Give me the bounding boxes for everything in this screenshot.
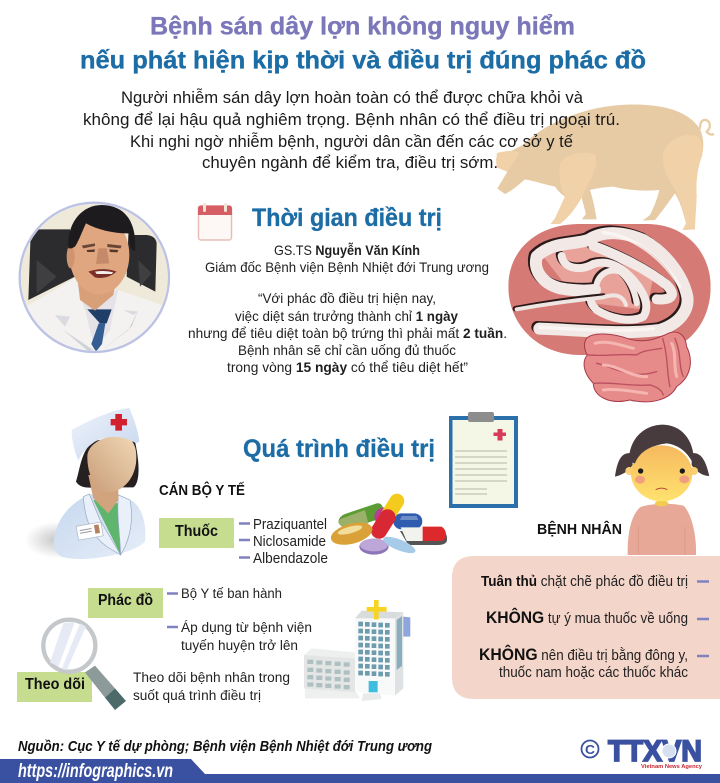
panel: patient rules bbox=[452, 556, 720, 699]
text: monitoring note: suốt quá trình điều trị bbox=[133, 688, 261, 703]
photo: doctor portrait bbox=[20, 203, 170, 357]
intro text bbox=[83, 88, 620, 172]
box: monitoring: Theo dõi bbox=[25, 676, 85, 693]
list: medicines: Niclosamide bbox=[253, 534, 326, 550]
text: monitoring note bbox=[133, 670, 290, 703]
box: treatment protocol bbox=[88, 588, 163, 618]
panel: patient rules: KHÔNG tự ý mua thuốc về uống bbox=[486, 608, 688, 627]
intro text: Người nhiễm sán dây lợn hoàn toàn có thể được chữa khỏi và bbox=[121, 88, 584, 107]
logo: TTXVN: TTXVN bbox=[608, 735, 702, 768]
logo: TTXVN: Vietnam News Agency bbox=[641, 764, 703, 770]
text block: expert quote: trong vòng 15 ngày có thể tiêu diệt hết” bbox=[227, 359, 468, 375]
text: monitoring note: Theo dõi bệnh nhân trong bbox=[133, 670, 290, 685]
title: Bệnh sán dây lợn không nguy hiểm bbox=[150, 12, 575, 40]
photo: tapeworm bbox=[507, 222, 713, 402]
list: protocol bbox=[167, 586, 312, 653]
heading: treatment time: Thời gian điều trị bbox=[252, 204, 442, 232]
icon: sick girl bbox=[615, 425, 709, 555]
footer bar bbox=[0, 759, 720, 783]
intro text: Khi nghi ngờ nhiễm bệnh, người dân cần đến các cơ sở y tế bbox=[130, 132, 574, 151]
panel: patient rules: KHÔNG nên điều trị bằng đông y, bbox=[479, 645, 688, 664]
icon: hospital bbox=[304, 600, 410, 701]
footer bar: https://infographics.vn bbox=[18, 761, 173, 782]
source line: Nguồn: Cục Y tế dự phòng; Bệnh viện Bệnh Nhiệt đới Trung ương bbox=[18, 738, 432, 755]
text block: expert quote: Giám đốc Bệnh viện Bệnh Nhiệt đới Trung ương bbox=[205, 259, 489, 275]
icon: magnifying glass bbox=[43, 620, 126, 710]
intro text: chuyên ngành để kiểm tra, điều trị sớm. bbox=[202, 153, 498, 172]
list: medicines: Praziquantel bbox=[253, 517, 327, 533]
text block: expert quote: việc diệt sán trưởng thành chỉ 1 ngày bbox=[235, 308, 458, 324]
list: protocol: Áp dụng từ bệnh viện bbox=[181, 620, 312, 635]
text block: expert quote bbox=[188, 242, 507, 375]
label: health staff: CÁN BỘ Y TẾ bbox=[159, 481, 245, 499]
title bbox=[80, 12, 646, 74]
box: medicine: Thuốc bbox=[175, 523, 218, 540]
panel: patient rules: Tuân thủ chặt chẽ phác đồ điều trị bbox=[481, 574, 688, 590]
box: monitoring bbox=[17, 672, 92, 702]
list: medicines bbox=[239, 517, 328, 567]
text block: expert quote: GS.TS Nguyễn Văn Kính bbox=[274, 242, 420, 258]
label: patient: BỆNH NHÂN bbox=[537, 520, 622, 538]
icon: calendar bbox=[198, 203, 232, 240]
title: nếu phát hiện kịp thời và điều trị đúng phác đồ bbox=[80, 46, 646, 74]
list: medicines: Albendazole bbox=[253, 551, 328, 567]
panel: patient rules: thuốc nam hoặc các thuốc khác bbox=[499, 665, 688, 681]
text block: expert quote: nhưng để tiêu diệt toàn bộ trứng thì phải mất 2 tuần. bbox=[188, 325, 507, 341]
list: protocol: Bộ Y tế ban hành bbox=[181, 586, 282, 601]
list: protocol: tuyến huyện trở lên bbox=[181, 638, 298, 653]
icon: pills bbox=[328, 491, 447, 556]
icon: clipboard bbox=[449, 412, 518, 508]
logo: TTXVN: C bbox=[585, 742, 596, 757]
icon: nurse bbox=[25, 408, 145, 559]
text block: expert quote: Bệnh nhân sẽ chỉ cần uống đủ thuốc bbox=[238, 342, 456, 358]
intro text: không để lại hậu quả nghiêm trọng. Bệnh nhân có thể điều trị ngoại trú. bbox=[83, 110, 620, 129]
text block: expert quote: “Với phác đồ điều trị hiện nay, bbox=[258, 290, 436, 306]
box: medicine bbox=[159, 518, 234, 548]
icon: pig silhouette bbox=[496, 105, 714, 230]
heading: treatment process: Quá trình điều trị bbox=[243, 435, 435, 463]
box: treatment protocol: Phác đồ bbox=[98, 592, 153, 609]
